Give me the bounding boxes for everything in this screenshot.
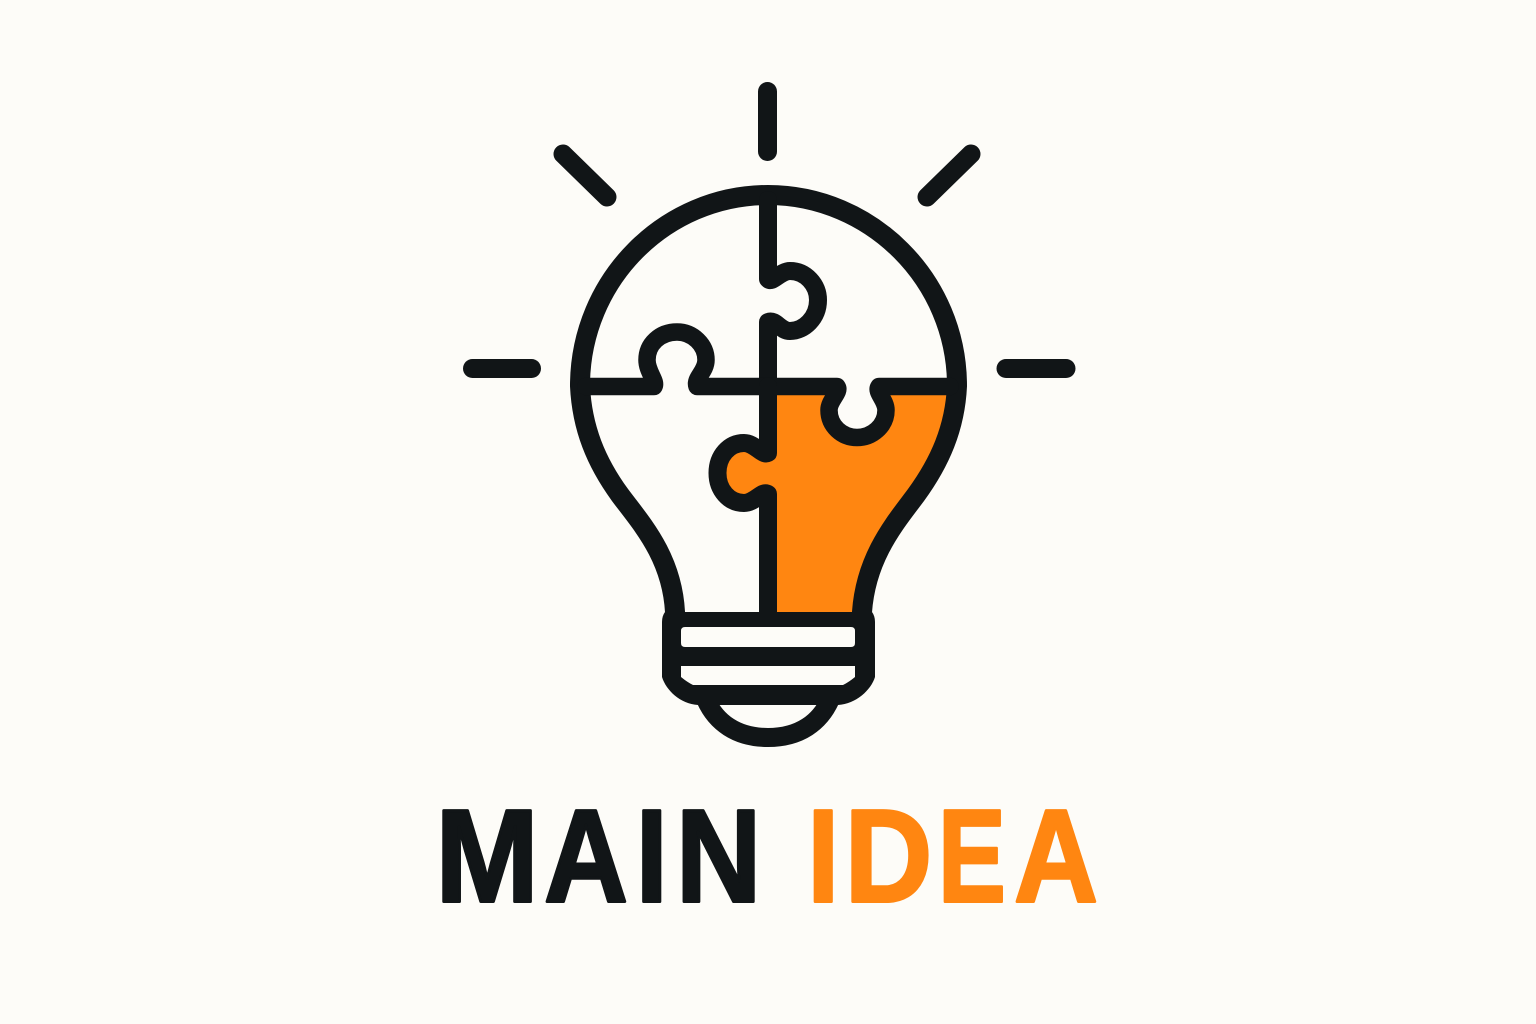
- title: M: [435, 782, 539, 930]
- puzzle seam: lower vertical with knob: [718, 386, 768, 612]
- title: I: [636, 782, 668, 930]
- icon: orange puzzle piece fill: [718, 386, 957, 612]
- icon: bulb base: [662, 612, 875, 705]
- title: I: [807, 782, 839, 930]
- icon: light rays: [472, 92, 1066, 368]
- title: A: [1014, 782, 1098, 930]
- title: N: [676, 782, 761, 930]
- puzzle seam: right horizontal with socket: [768, 386, 950, 438]
- bulb outline: [580, 195, 957, 612]
- puzzle seam: left horizontal with knob: [586, 332, 768, 386]
- title: A: [544, 782, 628, 930]
- title: D: [845, 782, 932, 930]
- icon: light bulb: [580, 195, 957, 738]
- title: E: [938, 782, 1006, 930]
- bulb tip: [706, 700, 830, 738]
- puzzle seam: upper vertical with lobe: [768, 200, 818, 386]
